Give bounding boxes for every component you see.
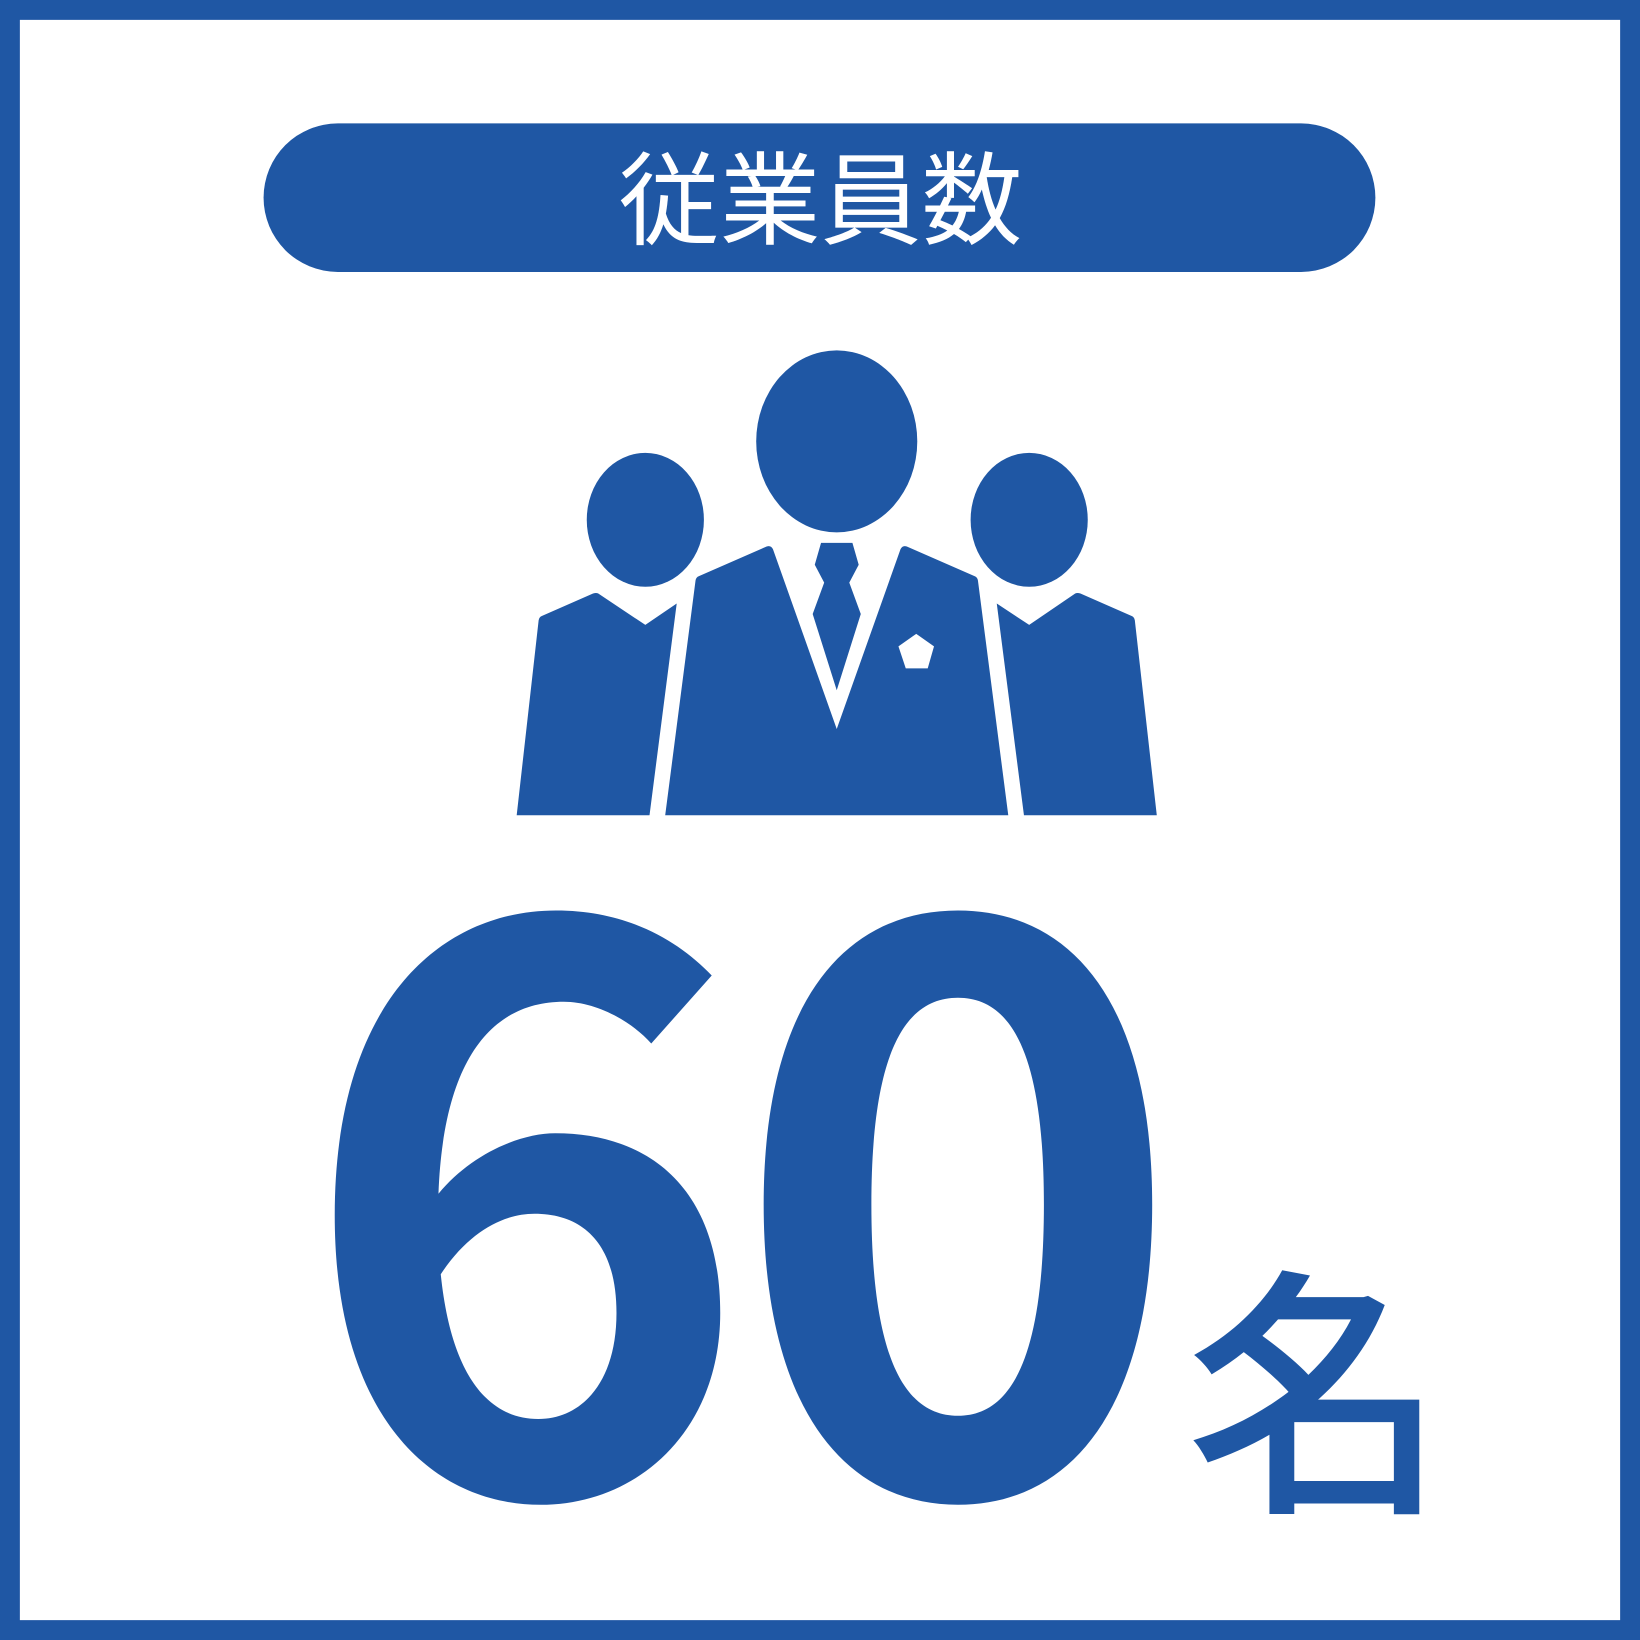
suit with lapel badge	[665, 546, 1008, 815]
unit: 名: 名	[1186, 1190, 1448, 1568]
necktie	[813, 543, 861, 690]
icon: three business people	[517, 350, 1157, 815]
center person	[665, 350, 1008, 815]
pill background	[264, 123, 1375, 272]
right person	[971, 453, 1157, 815]
left person	[517, 453, 704, 815]
title pill	[264, 120, 1375, 272]
title text: 従業員数	[619, 120, 1022, 266]
